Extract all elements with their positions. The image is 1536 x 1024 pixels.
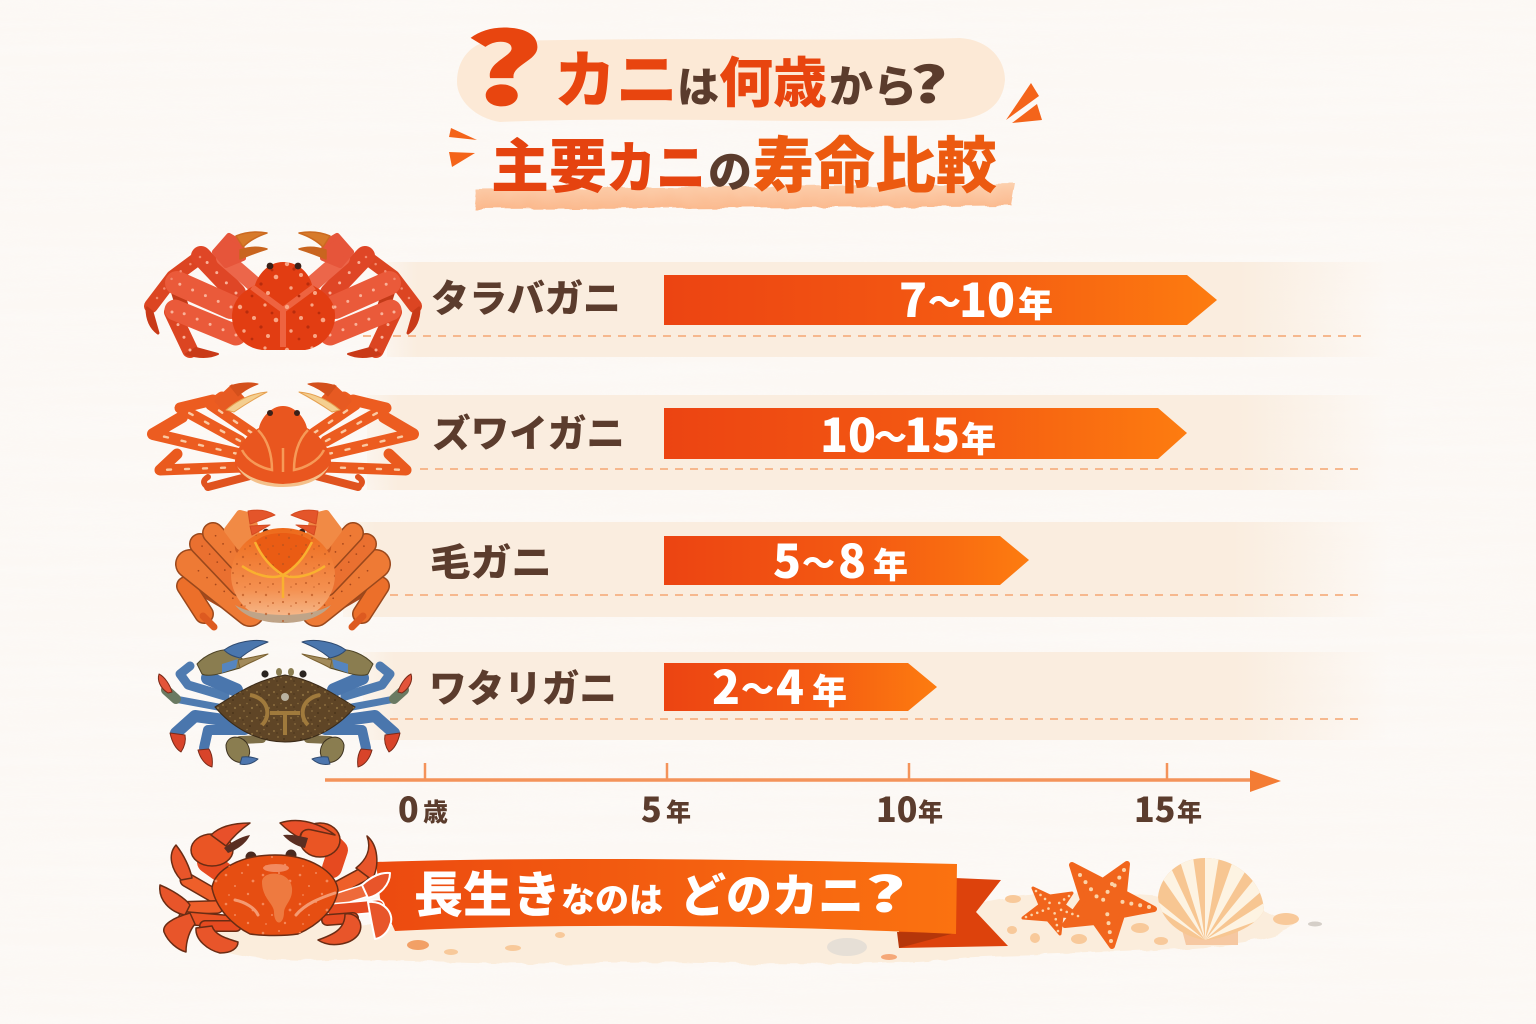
- axis arrow: [325, 778, 1252, 782]
- bar value: ～: [874, 411, 907, 459]
- icon: starfish pair: [1023, 864, 1154, 946]
- axis tick labels: [398, 783, 1202, 832]
- burst marks right: [1006, 83, 1042, 123]
- axis tick labels: 0: [398, 783, 419, 832]
- bar value: ～: [802, 537, 835, 585]
- row band: [343, 522, 1390, 617]
- bar value: 5: [773, 526, 801, 592]
- title line 2: 寿命比較: [753, 116, 997, 205]
- icon: scallop shell: [1158, 858, 1264, 945]
- axis tick labels: 年: [1177, 793, 1202, 829]
- title line 1: 何歳: [719, 39, 827, 118]
- icon: red king crab: [147, 232, 419, 357]
- icon: snow crab: [153, 383, 413, 487]
- row: 毛ガニ: [186, 510, 1390, 627]
- bar value: 7: [899, 265, 927, 331]
- burst marks left: [449, 128, 477, 167]
- large starfish: [1065, 864, 1154, 946]
- row: タラバガニ: [147, 232, 1390, 357]
- axis tick labels: 5: [641, 783, 662, 832]
- ribbon tail: [899, 878, 1008, 948]
- lifespan bar: [664, 275, 1217, 325]
- axis tick labels: 年: [666, 793, 691, 829]
- ribbon front: [376, 859, 957, 934]
- label: ズワイガニ: [432, 403, 625, 458]
- title question mark: ?: [910, 45, 948, 118]
- axis tick labels: 年: [918, 793, 943, 829]
- row band: [387, 262, 1390, 357]
- title line 1: から: [829, 51, 917, 115]
- sand strip: [195, 893, 1295, 964]
- icon: horsehair crab: [186, 510, 380, 627]
- title pill background: [457, 38, 1005, 122]
- icon: swimming crab: [158, 640, 412, 767]
- ribbon text: なのは: [561, 873, 663, 922]
- title line 2: 主要: [491, 120, 607, 204]
- title line 2 kana: カニ: [606, 124, 706, 205]
- title line 2: の: [708, 136, 752, 200]
- bar value: 15: [904, 400, 960, 466]
- row: ワタリガニ: [158, 640, 1390, 767]
- ribbon question mark: ?: [865, 857, 906, 926]
- bar value: ～: [928, 276, 961, 324]
- lifespan bar: [664, 408, 1187, 459]
- label: タラバガニ: [431, 268, 621, 323]
- bar value: 10: [820, 400, 876, 466]
- label: ワタリガニ: [429, 658, 617, 713]
- title line 1: カニ: [554, 30, 678, 120]
- row band: [367, 395, 1390, 490]
- lifespan bar: [664, 536, 1029, 585]
- sand pebbles: [407, 895, 1322, 960]
- label: 毛ガニ: [430, 532, 552, 587]
- small starfish: [1023, 888, 1082, 934]
- bar value: 2: [712, 652, 740, 718]
- bar value: 年: [961, 412, 996, 463]
- axis tick labels: 歳: [423, 793, 448, 829]
- title line 1: は: [677, 54, 719, 115]
- timeline axis: [325, 763, 1281, 832]
- icon: orange crab: [160, 821, 391, 953]
- bar value: 年: [1018, 277, 1053, 328]
- bar value: 8: [838, 526, 866, 592]
- axis tick labels: 15: [1134, 783, 1175, 832]
- ribbon text: 長生き: [414, 856, 561, 927]
- bar value: 10: [959, 265, 1015, 331]
- ribbon text: どのカニ: [680, 860, 864, 926]
- bottom ribbon banner: [376, 856, 1008, 948]
- lifespan bar: [664, 663, 937, 711]
- bar value: 年: [812, 664, 847, 715]
- underline brush: [474, 184, 1016, 209]
- bar value: 年: [873, 538, 908, 589]
- row band: [363, 652, 1390, 740]
- bar value: ～: [741, 663, 774, 711]
- axis tick labels: 10: [876, 783, 917, 832]
- title block: [449, 0, 1042, 209]
- bar value: 4: [776, 652, 804, 718]
- row: ズワイガニ: [153, 383, 1390, 490]
